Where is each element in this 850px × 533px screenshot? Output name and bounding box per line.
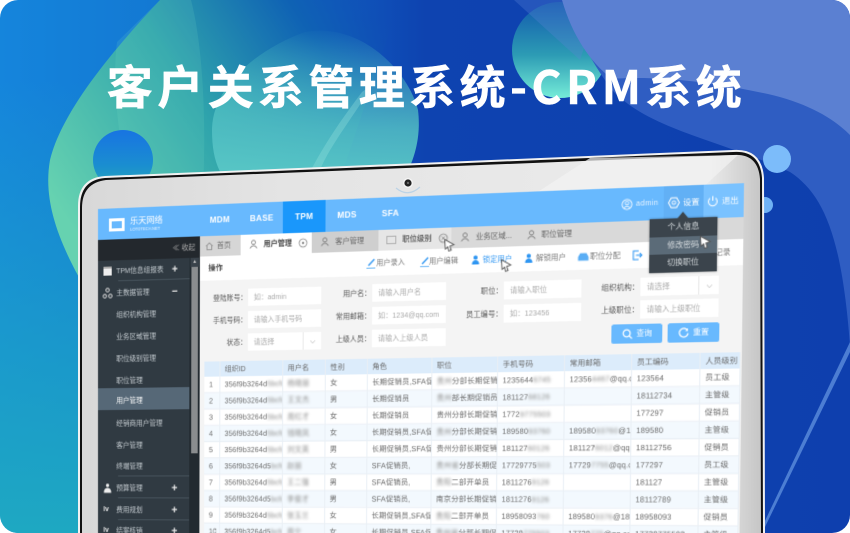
menu: 预算管理 (116, 482, 178, 494)
menu: TPM信息组报表: TPM信息组报表 (116, 265, 164, 275)
user table: 8 (209, 494, 213, 503)
user table: 18958093760 (502, 426, 550, 436)
user table: 123564 (637, 373, 664, 383)
scrollbar thumb (191, 267, 198, 453)
exit button (703, 183, 744, 218)
menu item: 修改密码: 修改密码 (667, 239, 699, 249)
menu: 职位管理: 职位管理 (116, 376, 143, 385)
input: superior position: 请输入上级职位 (647, 303, 701, 314)
action: 用户录入: 用户录入 (376, 257, 405, 267)
menu: 主数据管理 (116, 286, 178, 298)
user table: 组织ID (225, 364, 246, 374)
user table: 女 (330, 378, 337, 387)
user table: 18958093760 (501, 511, 550, 521)
user table: 18112789 (635, 495, 671, 504)
tab: 首页 (200, 235, 241, 257)
scrollbar (189, 258, 200, 533)
menu: 预算管理: + (171, 482, 177, 494)
icon: unlock user (524, 253, 534, 264)
nav: TPM active (283, 200, 326, 233)
small light circle (764, 197, 773, 213)
user table: 18112756 (636, 443, 672, 453)
form: employee number: 员工编号： (466, 309, 503, 319)
input: organization select (640, 276, 719, 296)
user table: SFA促销员, (372, 461, 411, 470)
menu: 主数据管理: 主数据管理 (116, 287, 149, 297)
menu: TPM信息组报表: + (172, 263, 178, 276)
nav: BASE: BASE (250, 212, 274, 223)
input: email (372, 305, 446, 325)
user table: SFA促销员, (372, 478, 410, 487)
user admin (621, 198, 659, 211)
input: status select (248, 332, 321, 351)
user table: 长期促销员 (372, 411, 409, 420)
user table: 18958093 (635, 512, 672, 522)
user table: 促销员 (705, 407, 729, 417)
cursor: tab close (444, 238, 456, 252)
menu: 终端管理: 终端管理 (116, 462, 143, 471)
blue circle (93, 130, 153, 177)
user table: 人员级别 (705, 356, 738, 366)
user table: 赵丽 (287, 461, 302, 470)
user table: 1895809376@18 (568, 512, 630, 522)
action bar (200, 239, 743, 281)
button: 查询 (611, 323, 662, 344)
input: email: 如：1234@qq.com (378, 309, 439, 320)
form: username: 用户名： (343, 288, 371, 298)
user table: 17729775503 (502, 460, 550, 470)
user table: 177297 (636, 460, 663, 470)
user table: 9 (209, 510, 213, 519)
form: mobile: 手机号码： (213, 315, 247, 325)
logo mark (109, 218, 125, 232)
menu: TPM信息组报表 (116, 263, 178, 276)
cursor: lock user (500, 258, 512, 272)
input: organization select: ⌵ (707, 280, 713, 290)
menu item: 切换职位: 切换职位 (667, 257, 699, 267)
input: login account: 如：admin (254, 292, 286, 302)
user table: 3 (209, 413, 213, 422)
user table: 员工级 (705, 372, 730, 382)
icon: transfer (632, 250, 644, 261)
button: 重置 (668, 322, 719, 343)
user table: 贵州部长期促销员 (437, 393, 497, 403)
exit button: 退出 (722, 195, 739, 206)
teal circle (512, 2, 608, 98)
user table: 4 (209, 429, 213, 438)
user table: 女 (330, 411, 337, 421)
user admin: admin (636, 200, 659, 208)
action: 锁定用户: 锁定用户 (483, 254, 512, 264)
tab: 客户管理: 客户管理 (335, 236, 364, 246)
button: 重置: 重置 (693, 327, 709, 337)
input: status select: 请选择 (254, 337, 274, 347)
action: 用户编辑: 用户编辑 (429, 256, 458, 266)
form: status: 状态： (227, 338, 247, 347)
input: status select: ⌵ (310, 336, 315, 345)
user table: 2 (209, 396, 213, 405)
menu: 费用规划 (116, 504, 178, 516)
input: mobile: 请输入手机号码 (254, 314, 302, 324)
settings dropdown menu (649, 217, 717, 273)
user table: 职位 (437, 360, 452, 370)
user table: 张玉兰 (287, 511, 309, 520)
action: 解锁用户: 解锁用户 (536, 252, 566, 263)
heading: 操作: 操作 (208, 263, 223, 273)
menu: 结案核销 (116, 525, 178, 533)
user table: 王二强 (287, 478, 309, 487)
user table: 主管级 (705, 425, 729, 435)
dropdown pointer (678, 211, 688, 218)
input: superior (372, 328, 446, 347)
scrollbar arrow (191, 258, 199, 267)
light blue circle (763, 145, 791, 173)
menu: 客户管理: 客户管理 (116, 441, 143, 450)
menu: 预算管理: 预算管理 (116, 483, 143, 492)
menu item: 个人信息: 个人信息 (667, 221, 699, 232)
tab bar (200, 217, 744, 257)
logo subtitle: LOTOTECH.NET (130, 226, 160, 232)
input: username: 请输入用户名 (378, 287, 421, 297)
scrollbar arrow: ▲ (192, 259, 197, 265)
user table: 刘文英 (287, 445, 309, 454)
user table: 手机号码 (503, 359, 533, 369)
action icons (366, 250, 644, 269)
user table: 常用邮箱 (570, 358, 601, 368)
user table: 1 (209, 380, 213, 389)
user table: 男 (330, 444, 337, 454)
tab: 职位管理: 职位管理 (541, 228, 572, 239)
input: organization select: 请选择 (647, 281, 670, 292)
user table: 18112760126 (502, 443, 550, 453)
tab: 用户管理 active (241, 232, 312, 255)
user table: 贵阳二部开单员 (436, 511, 489, 521)
user table: 189580 (636, 425, 663, 435)
tab: 业务区域 (460, 230, 512, 242)
form: login account: 登陆账号： (213, 293, 247, 303)
menu: 主数据管理: − (172, 286, 178, 298)
user table: 女 (330, 461, 337, 470)
user table: 员工级 (704, 460, 729, 470)
menu: 用户管理 active: 用户管理 (116, 396, 143, 405)
user table: 长期促销员 (372, 394, 409, 404)
user table: 男 (330, 395, 337, 404)
user table: 主管级 (704, 495, 728, 505)
input: superior: 请输入上级人员 (378, 333, 428, 343)
input: username (372, 282, 446, 302)
camera (396, 178, 420, 193)
user table: 17729775503 (502, 409, 551, 419)
user table: 18112734 (637, 390, 672, 401)
icon: pencil (366, 258, 376, 269)
button: 查询: 查询 (636, 328, 652, 338)
form: superior position: 上级职位： (601, 305, 639, 315)
cursor: dropdown (700, 236, 711, 249)
user table: 王文杰 (287, 395, 309, 405)
menu: 职位级别管理: 职位级别管理 (116, 353, 156, 363)
sidebar collapse row (98, 236, 200, 261)
sidebar icon: cost: Iv (103, 506, 109, 513)
icon: pencil (420, 256, 430, 268)
form: email: 常用邮箱： (336, 311, 371, 321)
user table: 18112768126 (502, 392, 550, 402)
nav: SFA: SFA (382, 207, 399, 218)
user table: 主管级 (704, 477, 728, 487)
nav: MDM: MDM (210, 214, 230, 225)
user table: 男 (330, 478, 337, 487)
user table: 周红才 (287, 412, 309, 421)
nav: MDS: MDS (337, 209, 357, 220)
user table: 杨晓丽 (288, 378, 309, 388)
action: 登录记录: 记录 (715, 247, 731, 257)
input: superior position (640, 298, 719, 319)
form: organization: 组织机构： (601, 282, 639, 293)
menu: 费用规划: 费用规划 (116, 505, 143, 514)
icon: assign (577, 252, 590, 262)
user table: 女 (330, 428, 337, 437)
user table: 12356446745 (503, 375, 551, 385)
user table: 促销员 (704, 442, 729, 452)
user table: 181127 (636, 477, 662, 487)
user table: 18112769126 (502, 494, 549, 504)
user table: 男 (330, 494, 337, 504)
user table: 7 (209, 478, 213, 487)
sidebar (98, 236, 200, 533)
screen: CRM application (98, 183, 744, 533)
title: 客户关系管理系统-CRM系统 (107, 52, 746, 118)
menu: 费用规划: + (171, 504, 177, 516)
input: position: 请输入职位 (510, 285, 547, 295)
sidebar icon: report (103, 266, 112, 276)
tab: 首页: 首页 (217, 240, 231, 250)
user table: 钱晓凤 (287, 428, 309, 438)
sidebar icon: budget (103, 483, 112, 494)
input: mobile (248, 309, 321, 328)
user table: 角色 (372, 362, 387, 371)
user table: 促销员 (703, 512, 728, 522)
settings button: 设置 (683, 197, 700, 207)
user table: 5 (209, 445, 213, 454)
teal blob (48, 0, 338, 276)
user table: 18112769126 (502, 477, 549, 487)
tab: 职位级别 (378, 227, 451, 251)
user table: 李俊才 (287, 494, 309, 503)
user table: SFA促销员, (372, 494, 410, 504)
logo (108, 214, 163, 232)
logo text: 乐天网络 (130, 214, 163, 226)
icon: lock user (471, 254, 480, 265)
menu: 业务区域管理: 业务区域管理 (116, 331, 156, 341)
user table: 177297 (636, 408, 664, 418)
tab: 业务区域: 业务区域... (476, 231, 512, 241)
teal drop (212, 35, 419, 172)
menu item: 修改密码 (649, 235, 717, 255)
user table: 贵阳二部开单员 (436, 478, 489, 487)
user table (204, 352, 740, 533)
nav: TPM active: TPM (295, 211, 313, 222)
user table: 6 (209, 461, 213, 471)
menu: 经销商用户管理: 经销商用户管理 (116, 418, 163, 428)
form: position: 职位： (481, 286, 503, 296)
menu: 组织机构管理: 组织机构管理 (116, 309, 156, 319)
settings button (664, 185, 704, 220)
upper right waves (590, 0, 850, 342)
tab: 职位管理 (527, 228, 572, 240)
input: employee number (504, 303, 581, 323)
input: position (504, 279, 582, 299)
tab: 客户管理 (312, 230, 379, 253)
input: login account (248, 287, 321, 306)
user table: 性别 (330, 362, 345, 372)
user table: 用户名 (288, 363, 309, 373)
input: employee number: 如：123456 (510, 308, 549, 318)
form: superior: 上级人员： (336, 334, 371, 344)
action: 职位分配: 职位分配 (590, 250, 620, 261)
user table: 员工编码 (637, 357, 669, 367)
sidebar icon: data (102, 287, 113, 299)
user table: 女 (329, 511, 337, 520)
sidebar collapse row: ≪ 收起 (173, 243, 195, 252)
tab: 职位级别: 职位级别 (402, 233, 432, 244)
top navigation bar (98, 183, 744, 240)
user table: 主管级 (705, 390, 730, 400)
tab: 用户管理 active: 用户管理 (264, 238, 292, 248)
menu: 用户管理 active (98, 387, 189, 410)
